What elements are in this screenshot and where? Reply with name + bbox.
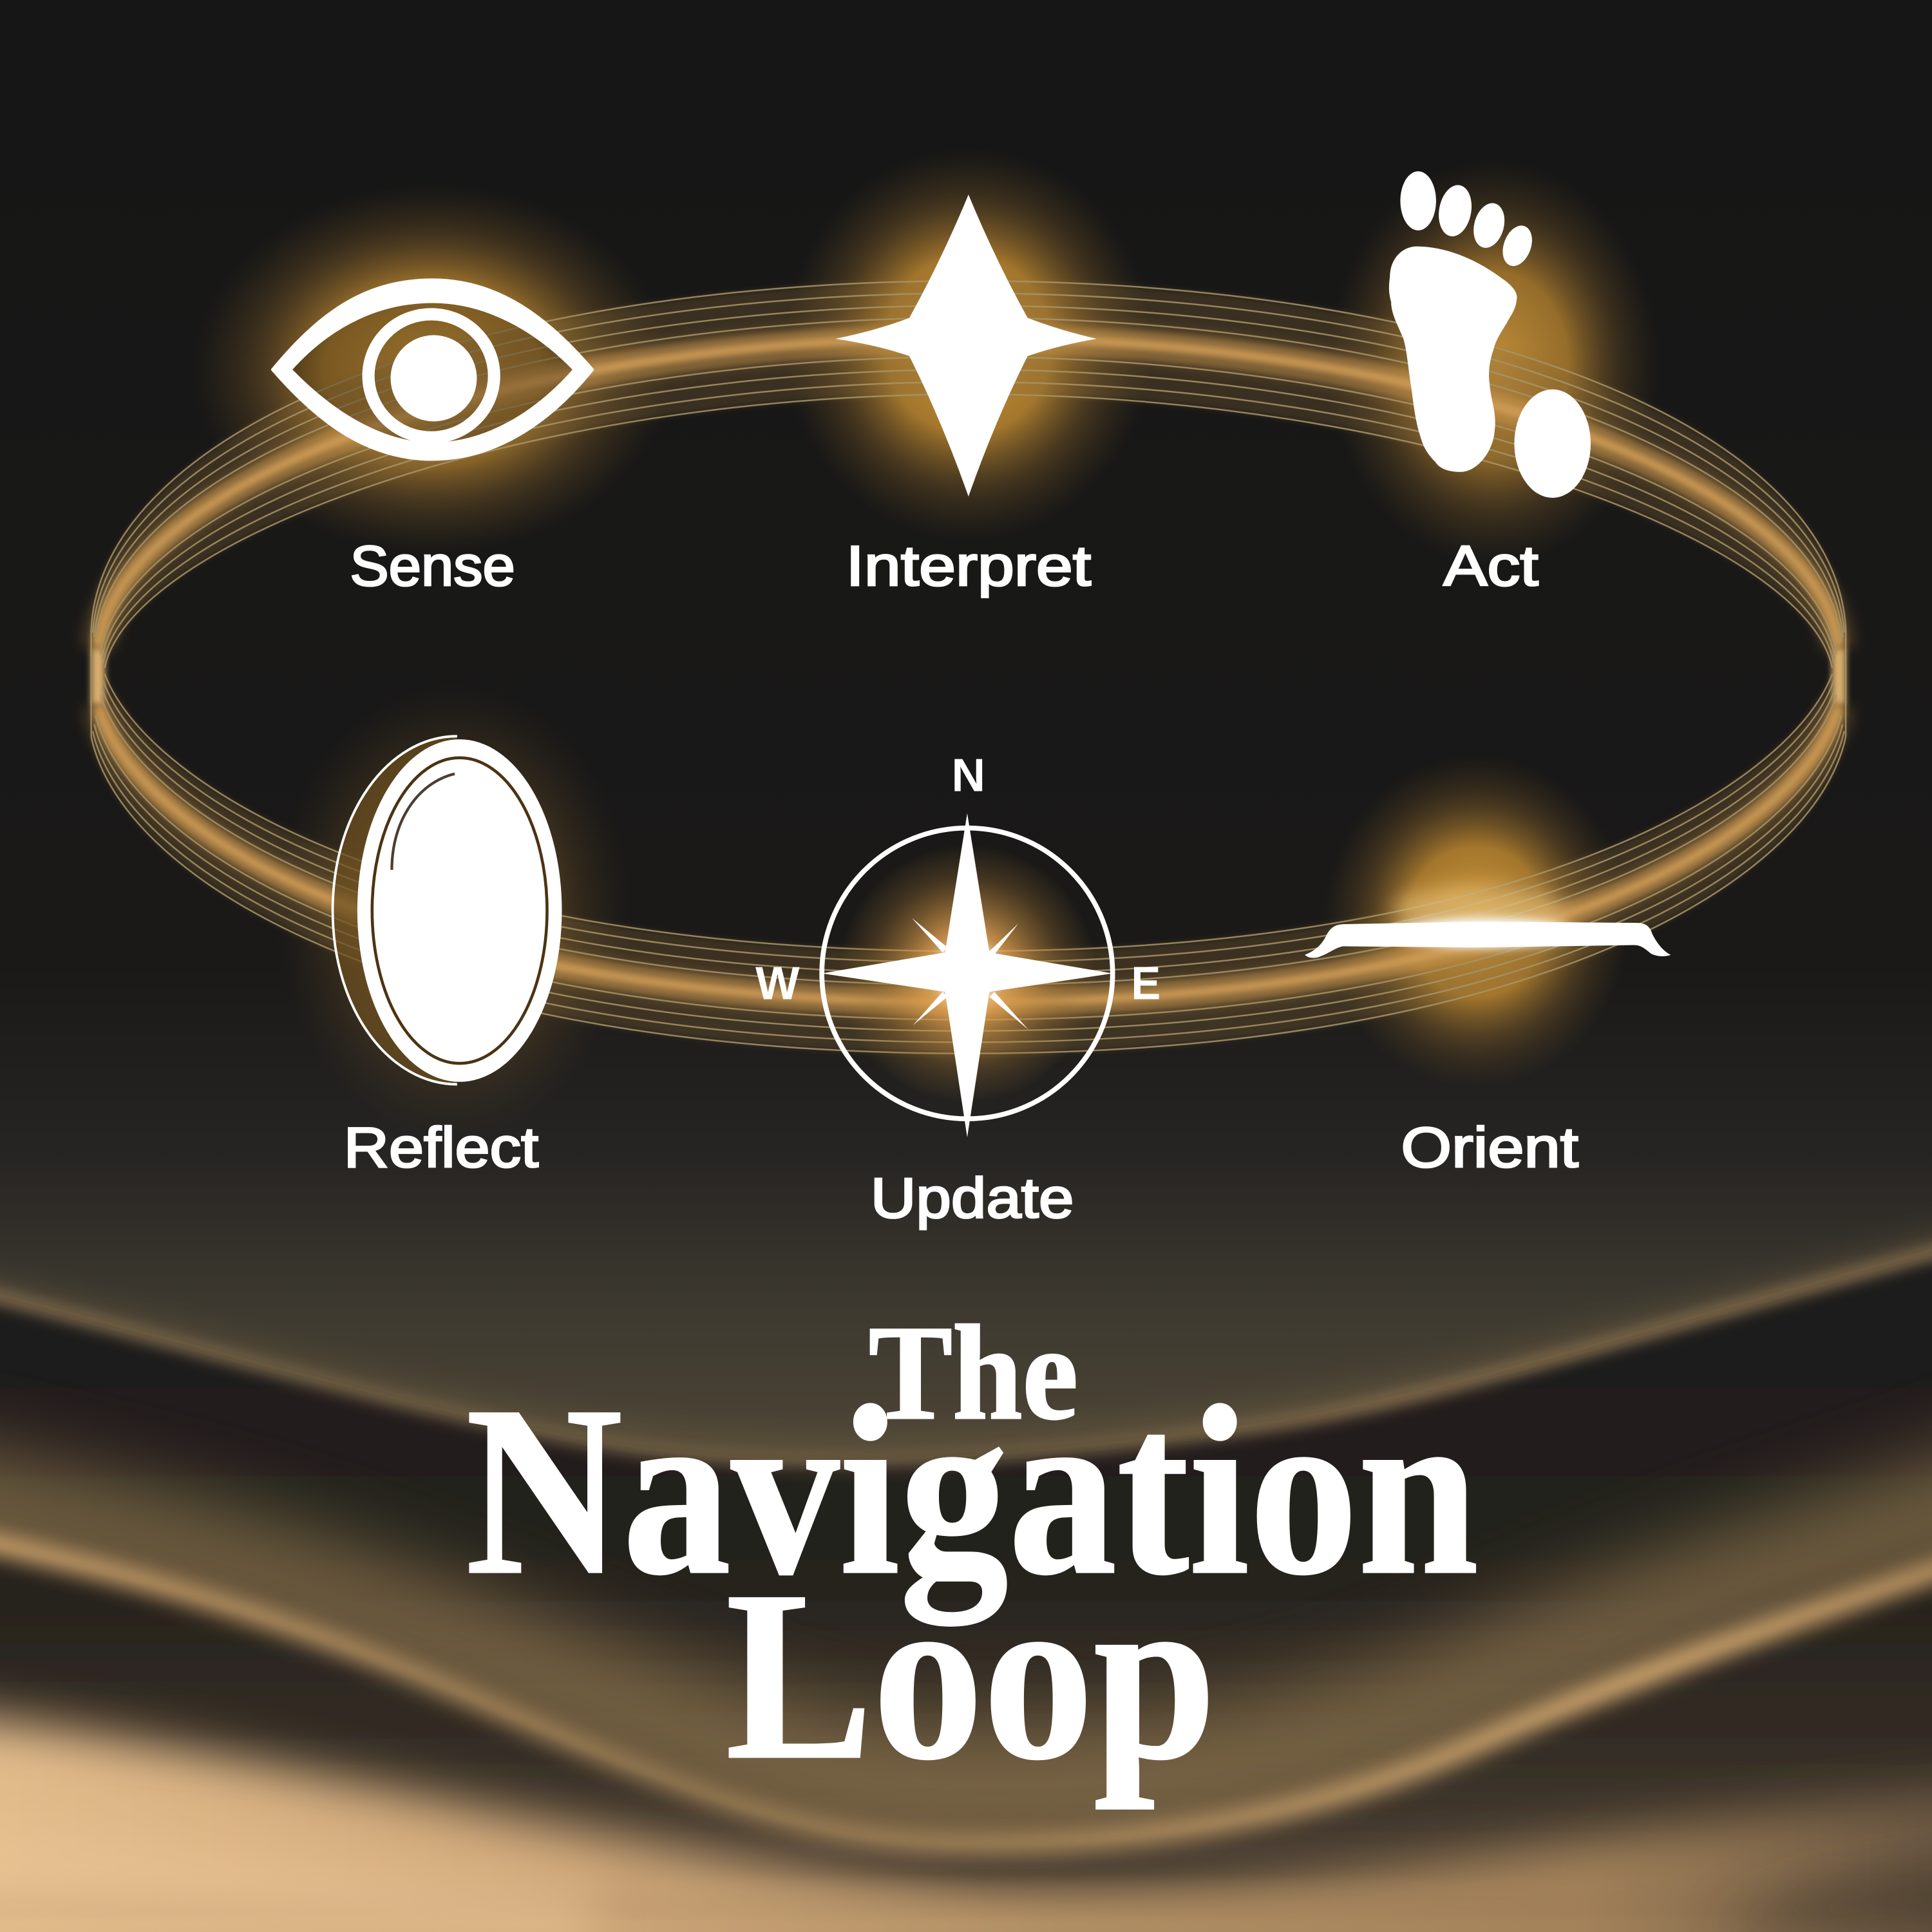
glow halos behind icons (192, 148, 1660, 1140)
icon: compass (Update) (822, 813, 1113, 1137)
icon: footprint (Act) (1389, 171, 1591, 498)
icon: mirror (Reflect) (333, 736, 562, 1084)
title (466, 1297, 1479, 1810)
label: Update: Update (871, 1166, 1074, 1229)
label: Interpret: Interpret (846, 534, 1091, 598)
title: Navigation (466, 1356, 1479, 1629)
title: The (869, 1297, 1078, 1448)
label: Act: Act (1443, 534, 1539, 598)
title: Loop (726, 1540, 1216, 1810)
icon: eye (Sense) (272, 279, 592, 460)
compass letters (755, 749, 1160, 1010)
label: Sense: Sense (350, 534, 515, 598)
compass letters: W (755, 958, 800, 1010)
icon: horizon (Orient) (1305, 887, 1671, 958)
background (0, 1041, 1932, 1932)
compass letters: E (1131, 958, 1160, 1010)
compass letters: N (952, 749, 985, 801)
label: Reflect: Reflect (344, 1115, 538, 1179)
icon: four-point star (Interpret) (835, 194, 1097, 497)
label: Orient: Orient (1401, 1115, 1578, 1179)
navigation loop ring (91, 281, 1846, 1054)
